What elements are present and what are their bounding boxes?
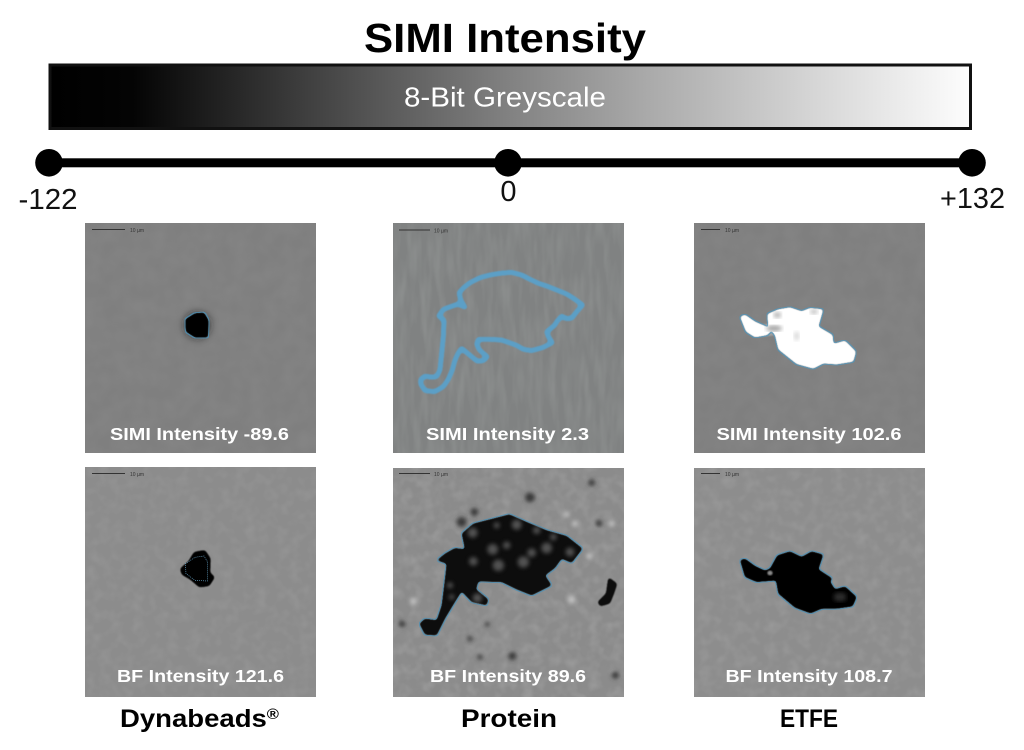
panel: ETFE BF — [694, 468, 925, 697]
intensity axis — [18, 149, 1005, 216]
bar label: 8-Bit Greyscale — [404, 82, 606, 112]
image label: SIMI Intensity -89.6 — [110, 424, 289, 444]
column label: Dynabeads: Dynabeads — [120, 705, 253, 733]
image label: BF Intensity 108.7 — [726, 666, 892, 686]
image label: BF Intensity 89.6 — [430, 666, 586, 686]
panel: ETFE SIMI — [694, 223, 925, 453]
panel: Dynabeads BF: 10 µm — [130, 472, 144, 478]
panel: ETFE BF: 10 µm — [725, 472, 739, 478]
title: SIMI Intensity — [364, 15, 646, 61]
panel: Protein SIMI — [393, 223, 624, 453]
image label: SIMI Intensity 102.6 — [716, 424, 902, 444]
axis label: zero: 0 — [500, 176, 517, 208]
panel: Protein BF — [393, 468, 624, 697]
column label: Protein: Protein — [461, 705, 557, 733]
panel: ETFE SIMI: 10 µm — [725, 228, 739, 234]
panel: Protein BF: 10 µm — [434, 472, 448, 478]
image label: SIMI Intensity 2.3 — [426, 424, 589, 444]
panel: Dynabeads SIMI: 10 µm — [130, 228, 144, 234]
axis label: maximum: +132 — [940, 183, 1005, 215]
speckles — [399, 479, 619, 679]
panel: Protein SIMI: 10 µm — [434, 228, 448, 234]
greyscale bar — [50, 65, 970, 128]
panel: Dynabeads BF — [85, 467, 316, 697]
column label: Dynabeads: ® — [267, 706, 279, 723]
column label: ETFE: ETFE — [780, 705, 838, 733]
axis label: minimum: -122 — [18, 184, 78, 216]
panel: Dynabeads SIMI — [85, 223, 316, 453]
image label: BF Intensity 121.6 — [117, 666, 284, 686]
bright cell texture — [447, 520, 574, 603]
